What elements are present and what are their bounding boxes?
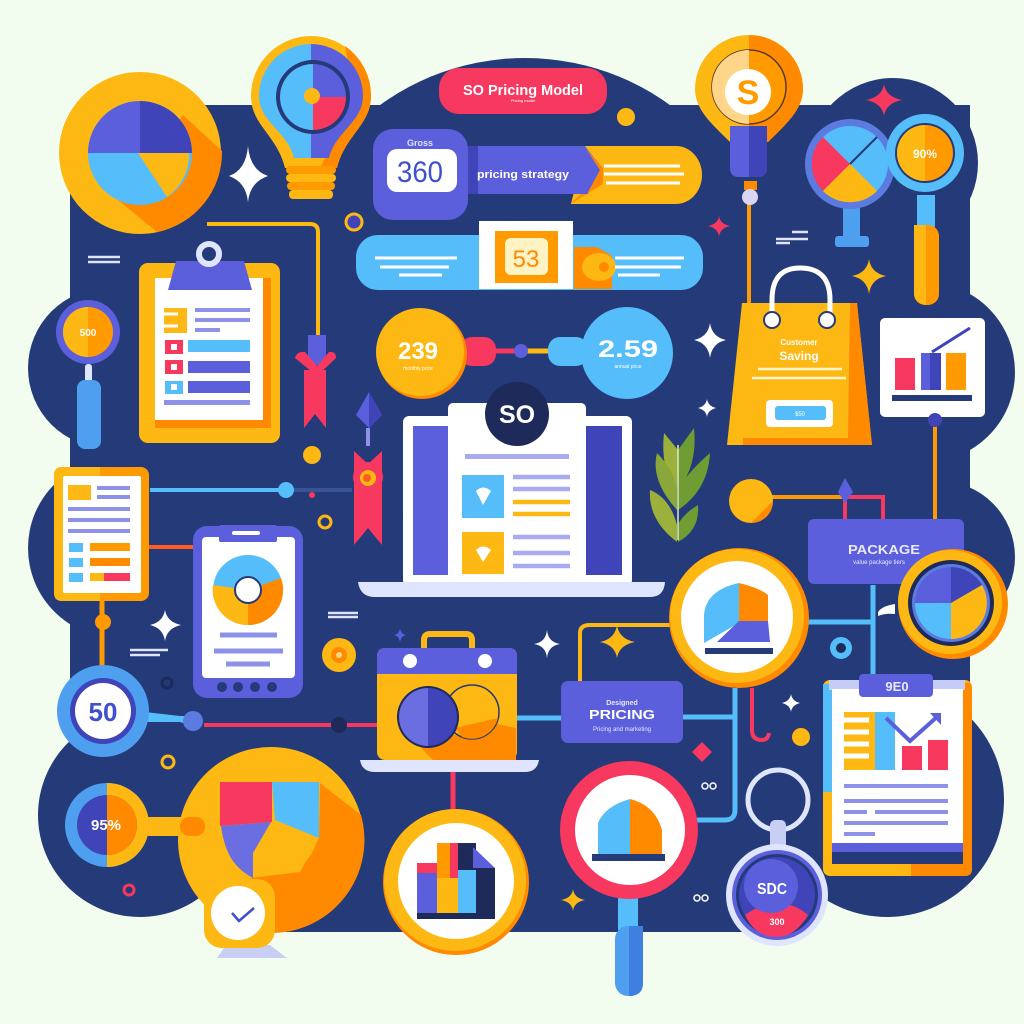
- icon: diamond pin: [353, 392, 383, 545]
- icon: magnifier left: 500: [80, 328, 97, 339]
- icon: dollar bulb: [695, 35, 803, 205]
- price bar 360: Gross: [407, 138, 433, 148]
- icon: yellow sparkle: [852, 259, 886, 294]
- panel: clipboard: [139, 244, 280, 443]
- panel: laptop: SO: [499, 401, 535, 429]
- icon: sparkle center: [694, 323, 726, 358]
- price bar 360: 360: [397, 156, 443, 189]
- dots: [303, 446, 331, 528]
- badge: pie circle right: [878, 549, 1008, 659]
- panel: shopping bag: Saving: [779, 349, 819, 363]
- price bar 53: 53: [513, 246, 539, 273]
- badge: 50: 50: [89, 697, 117, 727]
- icon: magnifier 90%: [886, 114, 964, 305]
- panel: chart card: [880, 318, 985, 417]
- panel: pricing label: Designed: [606, 700, 638, 707]
- node dots: [124, 640, 849, 901]
- icon: light bulb: [251, 36, 371, 199]
- icon: star yellow low: [561, 889, 585, 911]
- panel: shopping bag: Customer: [780, 338, 818, 347]
- icon: ring coin: [322, 638, 356, 672]
- title pill: [439, 68, 607, 114]
- icon: dashes: [130, 613, 358, 655]
- badge: chart circle right: [669, 548, 809, 688]
- panel: pricing label: PRICING: [589, 707, 655, 722]
- icon: pie magnifier: [805, 119, 895, 247]
- badge: bar chart circle: [383, 809, 529, 955]
- dot: [617, 108, 635, 126]
- icon: plant leaves: [650, 428, 710, 542]
- icon: node ring: [346, 214, 362, 230]
- panel: pricing label: [561, 681, 683, 743]
- panel: package: value package tiers: [853, 560, 905, 566]
- icon: briefcase camera: [360, 634, 539, 772]
- icon: magnifier 90%: 90%: [913, 147, 937, 161]
- panel: report clipboard: [823, 674, 972, 876]
- price bar 53: [356, 221, 703, 290]
- connector lines: [102, 200, 935, 820]
- icon: dollar bulb: S: [737, 74, 759, 112]
- badge: keychain: [726, 770, 828, 946]
- icon: pie chart circle top left: [59, 72, 222, 234]
- badge: 50: [57, 665, 203, 757]
- price bar 360: pricing strategy: [477, 169, 570, 181]
- connector nodes: [95, 482, 294, 630]
- badge: red ring magnifier: [560, 761, 698, 996]
- icon: smartphone: [193, 525, 303, 698]
- icon: sparkle yellow: [600, 625, 635, 658]
- node: yellow connector: [729, 478, 853, 523]
- panel: left document: [54, 467, 149, 601]
- badge: keychain: SDC: [757, 881, 787, 898]
- icon: small indigo sparkle: [394, 629, 406, 642]
- icon: pink star: [866, 84, 902, 116]
- badge: 95 percent: [65, 783, 205, 867]
- badge: keychain: 300: [769, 917, 785, 927]
- panel: package: [808, 519, 964, 584]
- chart: large shield pie: [178, 747, 364, 933]
- panel: pricing label: Pricing and marketing: [593, 727, 651, 733]
- icon: magnifier left: [56, 300, 120, 449]
- price bar 360: [373, 129, 702, 220]
- icon: sparkle phone: [150, 610, 181, 641]
- node: top right connector: [928, 413, 942, 427]
- price connector 239 to 2.59: annual price: [614, 364, 642, 370]
- panel: shopping bag: $50: [795, 412, 806, 418]
- badge: 95 percent: 95%: [91, 817, 121, 834]
- panel: laptop: [358, 382, 665, 597]
- title pill: Pricing model: [511, 98, 535, 103]
- icon: sparkle center low: [534, 630, 560, 658]
- price connector 239 to 2.59: monthly price: [403, 366, 433, 372]
- icon: red sparkle small: [708, 216, 730, 237]
- panel: package: PACKAGE: [848, 542, 920, 557]
- price connector 239 to 2.59: 2.59: [598, 336, 658, 363]
- title pill: SO Pricing Model: [463, 82, 583, 99]
- icon: sparkle left: [229, 146, 268, 202]
- icon: small sparkle: [698, 399, 716, 417]
- price connector 239 to 2.59: 239: [398, 338, 438, 365]
- icon: ribbon marker: [295, 335, 336, 428]
- icon: dash marks: [88, 232, 808, 262]
- panel: shopping bag: [727, 268, 872, 445]
- price connector 239 to 2.59: [376, 307, 673, 399]
- icon: sparkle small right: [782, 694, 800, 712]
- panel: report clipboard: 9E0: [885, 679, 909, 694]
- icon: clock: [204, 879, 287, 958]
